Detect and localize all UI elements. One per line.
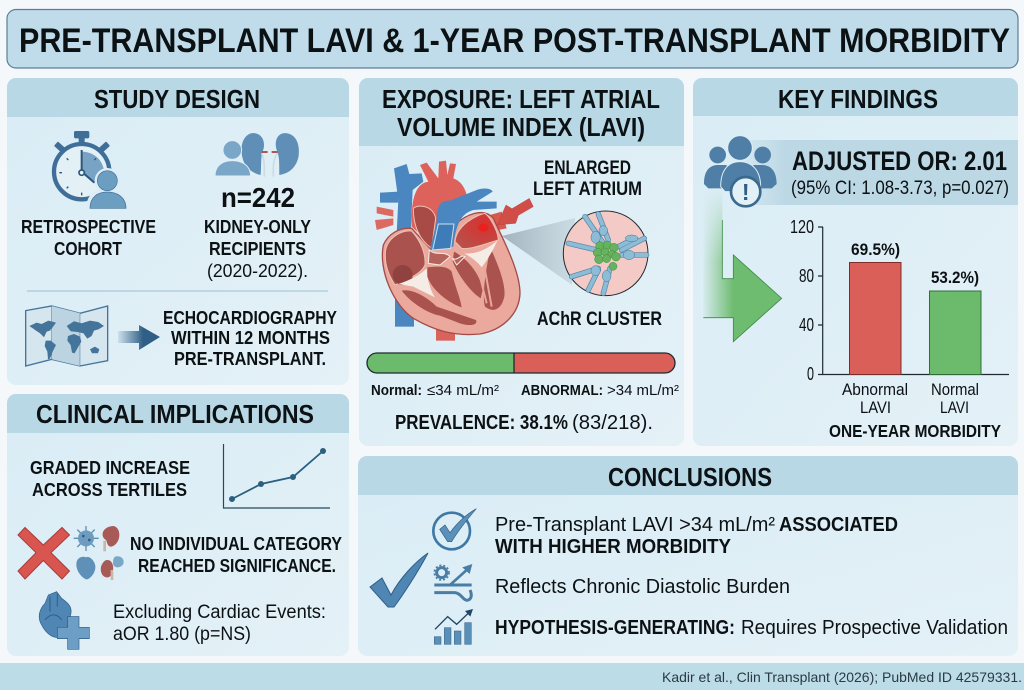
label: kidney-only recipients: KIDNEY-ONLY [204,216,312,237]
text: no individual category: NO INDIVIDUAL CATEGORY [130,533,343,554]
icon: heart with plus [39,592,89,649]
heading: clinical implications: CLINICAL IMPLICATIONS [36,399,314,429]
label: kidney-only recipients: (2020-2022). [207,260,308,281]
text: no individual category: REACHED SIGNIFICANCE. [138,555,336,576]
icon: large check [370,553,428,607]
bar chart: one-year morbidity: 53.2%) [931,268,979,287]
arrow: green [702,188,782,342]
alert mark: ! [742,179,750,205]
heading: conclusions: CONCLUSIONS [608,462,772,492]
conclusion 3: HYPOTHESIS-GENERATING: [495,617,735,639]
bar chart: one-year morbidity: 69.5%) [851,240,900,259]
label: abnormal range: >34 mL/m² [607,383,679,399]
text: excluding cardiac events: aOR 1.80 (p=NS) [113,624,251,645]
chart caption: ONE-YEAR MORBIDITY [829,421,1001,441]
text: graded increase: ACROSS TERTILES [32,479,187,500]
icon: red cross [18,528,70,579]
illustration: achr cluster [563,211,648,296]
bar chart: one-year morbidity: LAVI [860,398,891,417]
icon: patient and kidneys [215,133,299,177]
bar chart: one-year morbidity: 40 [799,315,814,335]
bar chart: one-year morbidity: 0 [807,364,814,384]
bar: abnormal [850,262,901,374]
title [7,10,1018,68]
label: normal range: Normal: [371,383,422,399]
text: graded increase [30,457,190,500]
conclusion 3: Requires Prospective Validation [741,617,1008,639]
icon: stopwatch with person [54,131,130,210]
label: normal range: ≤34 mL/m² [427,383,499,399]
conclusion 2: Reflects Chronic Diastolic Burden [495,576,790,598]
text: graded increase: GRADED INCREASE [30,457,190,478]
heading: exposure: EXPOSURE: LEFT ATRIAL [382,84,660,114]
icon: outcome categories [74,526,124,580]
label: retrospective cohort: COHORT [54,238,123,259]
arrow: map to echocardiography [118,325,160,350]
label: enlarged left atrium: LEFT ATRIUM [533,179,642,200]
sample size: n=242 [221,182,295,213]
label: kidney-only recipients [204,216,312,281]
label: enlarged left atrium [533,158,642,200]
label: enlarged left atrium: ENLARGED [544,158,631,179]
heading: exposure [382,84,660,142]
conclusion 1: WITH HIGHER MORBIDITY [495,536,732,558]
label: kidney-only recipients: RECIPIENTS [209,238,306,259]
heading: study design: STUDY DESIGN [94,84,260,114]
label: abnormal range [521,383,679,399]
conclusion 3 [495,617,1008,639]
icon: people with alert [704,136,777,206]
label: achr cluster: AChR CLUSTER [537,309,662,330]
label: retrospective cohort [21,216,156,259]
icon: rising bar chart [434,609,473,644]
icon: gear and flow [434,564,472,600]
icon: world map [26,306,108,366]
icon: circled check [433,509,476,549]
panel: study design [7,78,349,385]
conclusion 1: ASSOCIATED [779,514,898,536]
heading: key findings: KEY FINDINGS [778,84,938,114]
label: abnormal range: ABNORMAL: [521,383,603,399]
panel: clinical implications [7,394,349,656]
prevalence: PREVALENCE: 38.1% [395,412,568,434]
conclusion 1: Pre-Transplant LAVI >34 mL/m² [495,514,775,536]
adjusted odds ratio [791,146,1009,199]
bar chart: one-year morbidity: LAVI [940,398,969,417]
footer citation: Kadir et al., Clin Transplant (2026); PubMed ID 42579331. [662,669,1022,685]
prevalence: (83/218). [572,412,653,434]
label: normal range [371,383,499,399]
line chart: tertile trend [224,444,330,508]
range bar: normal vs abnormal [367,353,675,373]
label: echocardiography timing: WITHIN 12 MONTHS [171,327,330,348]
bar chart: one-year morbidity: Abnormal [842,380,908,399]
result band [745,140,1018,205]
bar chart: one-year morbidity: 120 [790,217,814,237]
footer citation [0,663,1024,690]
conclusion 1 [495,514,898,558]
illustration: heart [375,161,533,341]
text: no individual category [130,533,343,576]
heading: exposure: VOLUME INDEX (LAVI) [397,112,645,142]
label: echocardiography timing: ECHOCARDIOGRAPHY [163,307,338,328]
bar chart: one-year morbidity [790,217,1009,417]
panel: exposure [359,78,684,446]
bar: normal [930,291,981,374]
text: excluding cardiac events [113,602,326,645]
text: excluding cardiac events: Excluding Cardiac Events: [113,602,326,623]
label: echocardiography timing: PRE-TRANSPLANT. [174,348,326,369]
panel: conclusions [358,456,1018,656]
panel: key findings [693,78,1018,446]
bar chart: one-year morbidity: 80 [799,266,814,286]
label: echocardiography timing [163,307,338,369]
label: retrospective cohort: RETROSPECTIVE [21,216,156,237]
zoom cone [502,218,575,285]
bar chart: one-year morbidity: Normal [931,380,979,399]
